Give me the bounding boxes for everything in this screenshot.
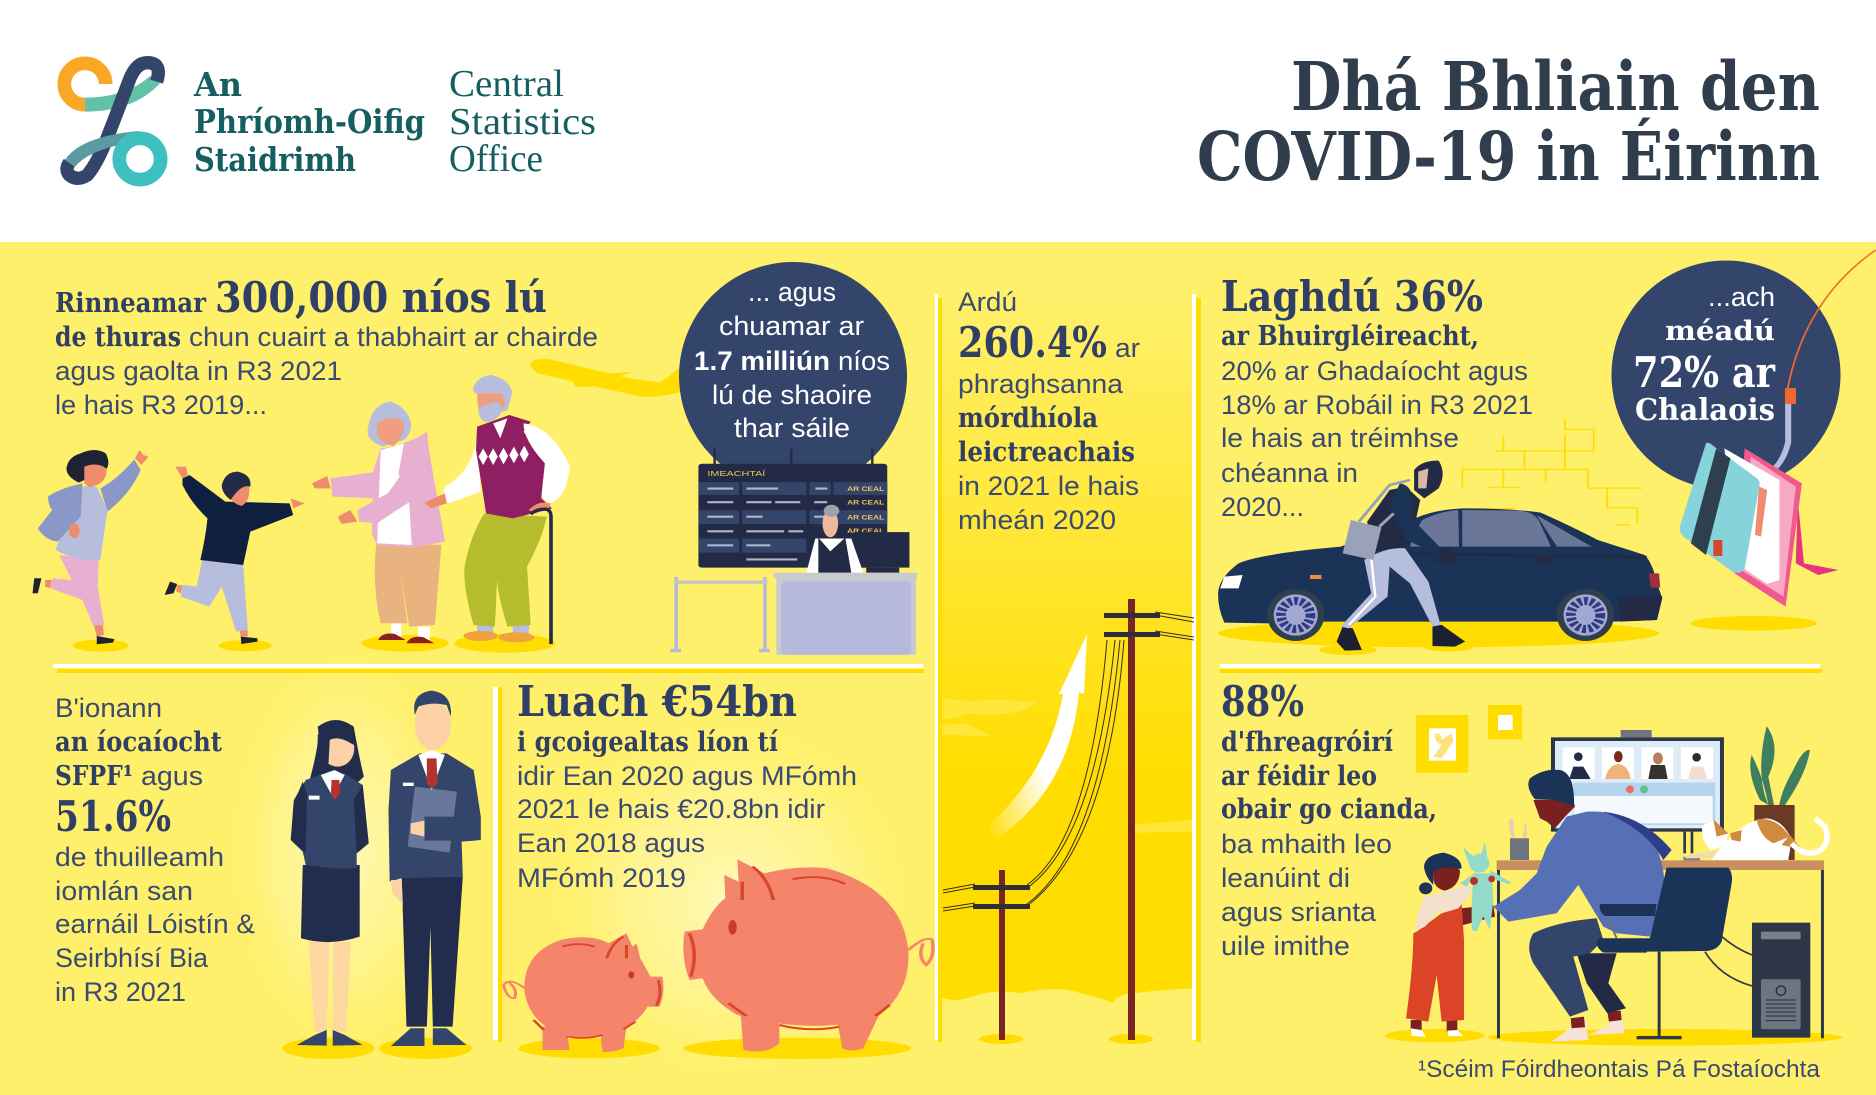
text: €54bn household savings: 2021 le hais €20.8bn idir	[517, 794, 825, 824]
father	[1445, 770, 1672, 1042]
callout circle: overseas holidays: thar sáile	[734, 413, 850, 443]
text: 260.4% electricity price rise: ar	[1115, 333, 1140, 363]
text: 36% drop in burglary: le hais an tréimhse	[1221, 423, 1459, 453]
text: 260.4% electricity price rise: in 2021 le hais	[958, 471, 1139, 501]
logo wordmark: Irish: An	[193, 65, 242, 104]
cat	[1683, 818, 1827, 860]
grandfather	[424, 375, 570, 644]
text: 300,000 fewer trips	[55, 273, 598, 420]
callout circle: fraud	[1612, 260, 1840, 490]
text: SFPF share of earnings: SFPF¹	[55, 761, 133, 792]
callout circle: overseas holidays: níos	[838, 346, 890, 376]
text: 36% drop in burglary: chéanna in	[1221, 458, 1358, 488]
illustration: departures board and check-in desk: AR CEAL	[847, 527, 885, 535]
text: 36% drop in burglary	[1221, 272, 1533, 522]
text: SFPF share of earnings: de thuilleamh	[55, 842, 224, 872]
text: SFPF share of earnings: agus	[141, 761, 203, 791]
panel: rising electricity prices background	[939, 294, 1195, 1043]
computer tower	[1705, 923, 1810, 1038]
desk	[1497, 818, 1824, 1039]
title	[1197, 47, 1820, 196]
child with toy	[1406, 842, 1512, 1037]
text: 36% drop in burglary: 18% ar Robáil in R3 2021	[1221, 390, 1533, 420]
text: 88% want remote work: ar féidir leo	[1221, 761, 1377, 792]
text: SFPF share of earnings	[55, 693, 255, 1007]
text: 88% want remote work: ba mhaith leo	[1221, 829, 1392, 859]
illustration: piggy banks	[504, 859, 933, 1059]
text: 88% want remote work: d'fhreagróirí	[1221, 727, 1394, 758]
text: 260.4% electricity price rise: leictreachais	[958, 437, 1135, 468]
text: €54bn household savings: i gcoigealtas líon tí	[517, 727, 779, 758]
text: 88% want remote work: 88%	[1221, 677, 1304, 726]
logo wordmark: English: Statistics	[449, 101, 596, 143]
logo wordmark: Irish: Staidrimh	[194, 140, 356, 179]
logo wordmark: English: Central	[449, 63, 564, 105]
logo: CSO mark	[64, 63, 161, 180]
large piggy bank	[683, 859, 933, 1059]
text: 260.4% electricity price rise: 260.4%	[958, 318, 1107, 367]
callout circle: overseas holidays: chuamar ar	[719, 311, 864, 341]
text: SFPF share of earnings: Seirbhísí Bia	[55, 943, 209, 973]
text: 36% drop in burglary: Laghdú 36%	[1221, 272, 1483, 321]
woman	[291, 720, 369, 1046]
man	[388, 691, 481, 1046]
illustration: electricity poles and wires	[943, 599, 1194, 1044]
logo wordmark: Irish	[193, 65, 425, 179]
text: 300,000 fewer trips: Rinneamar	[55, 288, 207, 319]
text: 260.4% electricity price rise: mórdhíola	[958, 403, 1098, 434]
yellow background panel	[0, 242, 1876, 1095]
illustration: plane	[531, 359, 683, 397]
grandmother	[312, 402, 445, 643]
text: €54bn household savings	[517, 677, 857, 893]
text: SFPF share of earnings: 51.6%	[55, 792, 171, 841]
illustration: car and burglar	[1218, 461, 1662, 655]
logo wordmark: English	[449, 63, 596, 180]
car	[1218, 508, 1662, 641]
text: €54bn household savings: idir Ean 2020 agus MFómh	[517, 761, 857, 791]
illustration: credit cards on fishing hook	[1680, 250, 1876, 631]
burglar	[1337, 461, 1465, 651]
illustration: hospitality staff	[282, 691, 481, 1059]
glow behind staff	[225, 640, 465, 1060]
callout circle: fraud: Chalaois	[1635, 393, 1775, 428]
text: 300,000 fewer trips: agus gaolta in R3 2021	[55, 356, 342, 386]
callout circle: overseas holidays: ... agus	[748, 277, 836, 307]
text: 36% drop in burglary: 2020...	[1221, 492, 1304, 522]
text: SFPF share of earnings: in R3 2021	[55, 977, 186, 1007]
text: 260.4% electricity price rise	[958, 287, 1140, 535]
text: 300,000 fewer trips: chun cuairt a thabhairt ar chairde	[189, 322, 598, 352]
callout circle: fraud: 72% ar	[1633, 348, 1776, 397]
chair	[1597, 868, 1732, 953]
boy	[165, 467, 305, 644]
text: SFPF share of earnings: B'ionann	[55, 693, 162, 723]
text: 88% want remote work	[1221, 677, 1437, 961]
divider lines	[53, 294, 1822, 1042]
footnote: ¹Scéim Fóirdheontais Pá Fostaíochta	[1418, 1056, 1821, 1083]
illustration: working from home	[1385, 705, 1842, 1046]
logo wordmark: Irish: Phríomh-Oifig	[194, 102, 425, 141]
callout circle: overseas holidays	[679, 262, 907, 490]
text: 88% want remote work: uile imithe	[1221, 931, 1350, 961]
illustration: departures board and check-in desk: AR CEAL	[847, 514, 885, 521]
text: 36% drop in burglary: 20% ar Ghadaíocht agus	[1221, 356, 1528, 386]
illustration: brick wall	[1462, 419, 1642, 525]
text: SFPF share of earnings: earnáil Lóistín &	[55, 909, 255, 939]
text: 300,000 fewer trips: le hais R3 2019...	[55, 390, 267, 420]
girl	[32, 450, 149, 644]
plant	[1750, 726, 1810, 860]
callout circle: overseas holidays: lú de shaoire	[712, 380, 872, 410]
text: 88% want remote work: obair go cianda,	[1221, 794, 1437, 825]
text: 88% want remote work: leanúint di	[1221, 863, 1350, 893]
illustration: departures board and check-in desk: AR CEAL	[847, 499, 885, 506]
monitor and video call	[1551, 730, 1724, 861]
small piggy bank	[504, 933, 663, 1058]
text: €54bn household savings: Ean 2018 agus	[517, 828, 705, 858]
text: €54bn household savings: MFómh 2019	[517, 863, 686, 893]
text: 260.4% electricity price rise: phraghsanna	[958, 369, 1124, 399]
illustration: departures board and check-in desk: IMEACHTAÍ	[707, 470, 766, 478]
text: 260.4% electricity price rise: mheán 2020	[958, 505, 1116, 535]
text: SFPF share of earnings: iomlán san	[55, 876, 193, 906]
callout circle: fraud: méadú	[1665, 316, 1775, 347]
text: 88% want remote work: agus srianta	[1221, 897, 1377, 927]
text: 300,000 fewer trips: 300,000 níos lú	[215, 273, 547, 322]
illustration: departures board and check-in desk	[670, 449, 917, 655]
text: 260.4% electricity price rise: Ardú	[958, 287, 1017, 317]
wall frames	[1416, 705, 1522, 773]
callout circle: fraud: ...ach	[1708, 282, 1775, 312]
callout circle: overseas holidays: 1.7 milliún	[694, 346, 830, 376]
glow behind piggy banks	[540, 710, 920, 1090]
text: €54bn household savings: Luach €54bn	[517, 677, 797, 726]
text: SFPF share of earnings: an íocaíocht	[55, 727, 222, 758]
logo wordmark: English: Office	[449, 138, 543, 180]
text: 36% drop in burglary: ar Bhuirgléireacht,	[1221, 321, 1479, 352]
illustration: departures board and check-in desk: AR CEAL	[847, 485, 885, 493]
illustration: rising arrow	[988, 634, 1087, 840]
text: 300,000 fewer trips: de thuras	[55, 322, 181, 353]
illustration: family greeting grandparents	[32, 375, 570, 653]
